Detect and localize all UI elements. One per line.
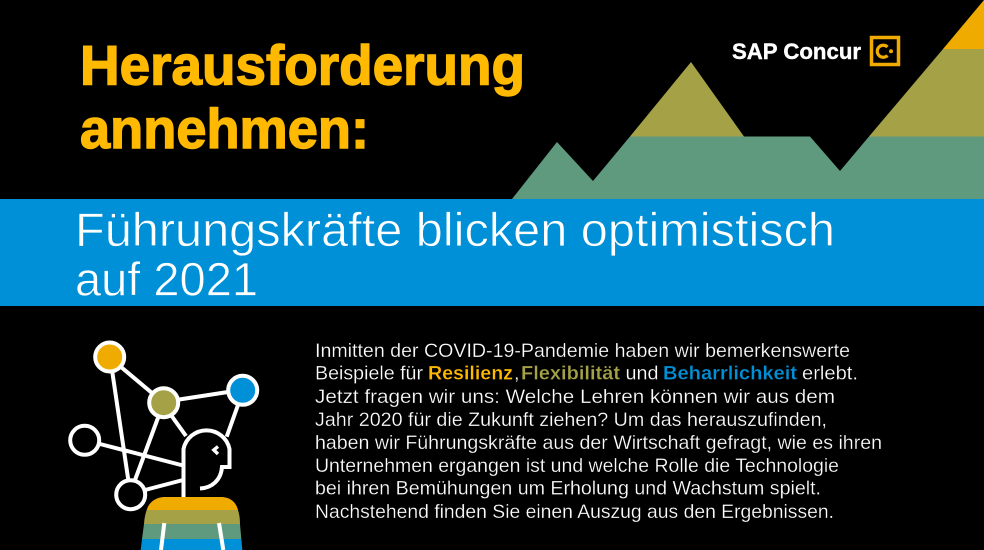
eye bbox=[214, 446, 218, 454]
node: yellow bbox=[95, 342, 124, 372]
intro text: Jetzt fragen wir uns: Welche Lehren können wir aus dem bbox=[315, 386, 835, 408]
head bbox=[184, 430, 230, 497]
node: blue bbox=[228, 376, 257, 405]
intro text: Inmitten der COVID-19-Pandemie haben wir bemerkenswerte bbox=[315, 340, 850, 362]
title: Herausforderung bbox=[80, 34, 525, 96]
intro text: erlebt. bbox=[802, 362, 858, 384]
intro text: bei ihren Bemühungen um Erholung und Wachstum spielt. bbox=[315, 478, 821, 500]
torso with stripes bbox=[141, 497, 242, 550]
icon: person with network bbox=[70, 342, 257, 550]
subtitle: auf 2021 bbox=[75, 252, 258, 306]
intro text: und bbox=[626, 362, 658, 384]
node: empty left bbox=[70, 426, 99, 455]
subtitle band bbox=[0, 199, 984, 306]
intro text bbox=[315, 340, 882, 523]
intro text: Resilienz bbox=[428, 362, 513, 384]
subtitle: Führungskräfte blicken optimistisch bbox=[75, 203, 835, 256]
intro text: Unternehmen ergangen ist und welche Rolle die Technologie bbox=[315, 455, 839, 477]
title: annehmen: bbox=[80, 97, 369, 160]
intro text: Nachstehend finden Sie einen Auszug aus den Ergebnissen. bbox=[315, 501, 834, 523]
logo: SAP Concur: SAP Concur bbox=[732, 39, 861, 64]
network lines bbox=[100, 367, 238, 490]
intro text: haben wir Führungskräfte aus der Wirtschaft gefragt, wie es ihren bbox=[315, 432, 882, 454]
intro text: , bbox=[514, 362, 519, 384]
title bbox=[80, 34, 525, 160]
node: olive bbox=[149, 388, 178, 417]
intro text: Jahr 2020 für die Zukunft ziehen? Um das herauszufinden, bbox=[315, 409, 827, 431]
node: empty bottom bbox=[116, 480, 145, 509]
icon: Concur C mark bbox=[872, 38, 898, 64]
intro text: Beharrlichkeit bbox=[663, 362, 798, 384]
intro text: Beispiele für bbox=[315, 362, 424, 384]
mountain illustration bbox=[512, 0, 984, 199]
intro text: Flexibilität bbox=[521, 362, 621, 384]
subtitle bbox=[75, 203, 835, 306]
